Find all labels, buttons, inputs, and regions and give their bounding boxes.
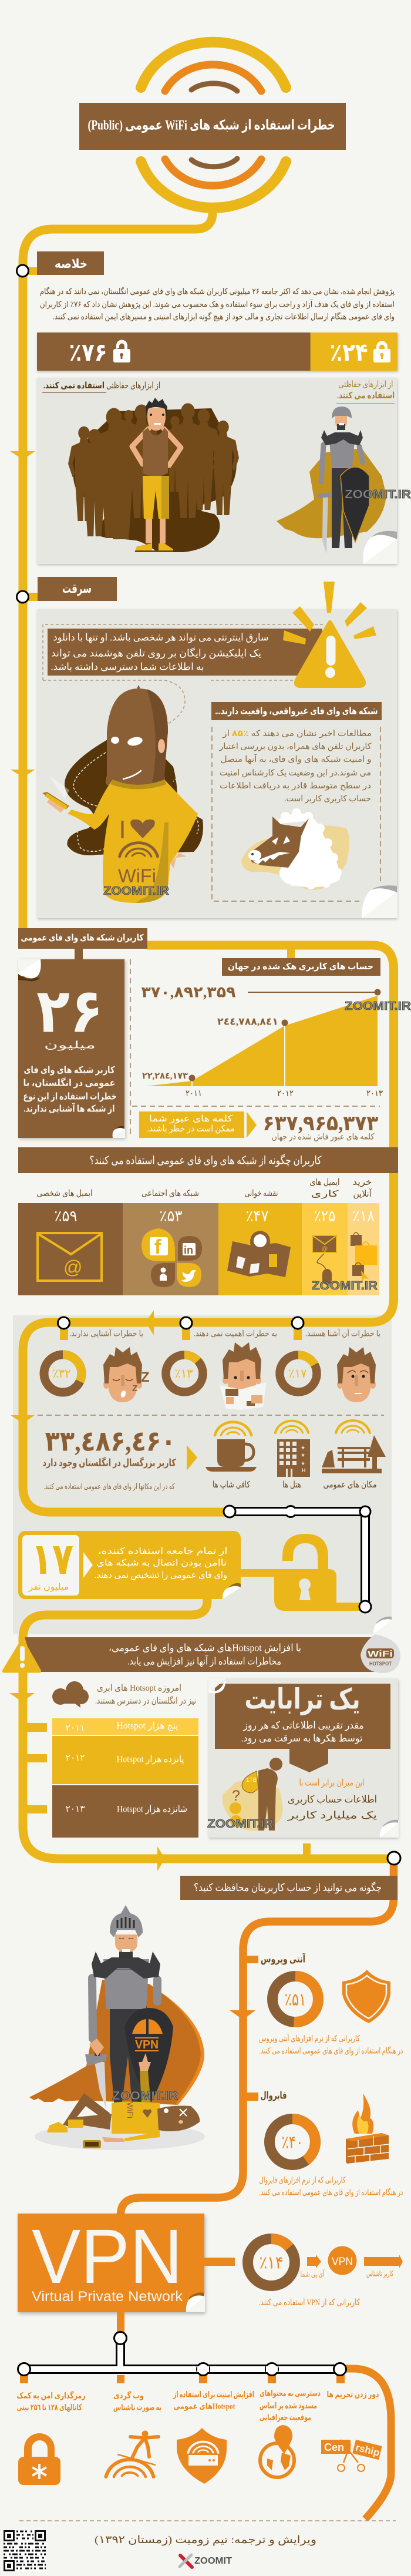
icon: hotel: ★ (301, 1460, 305, 1466)
callout: internet thief: یک اپلیکیشن رایگان بر روی تلفن هوشمند می تواند (51, 647, 261, 659)
row: 2013: شانزده هزار Hotspot (117, 1805, 187, 1815)
text block: fake networks (219, 729, 372, 804)
sword (95, 2062, 106, 2109)
white tube: VPN benefits connector (18, 2332, 346, 2383)
icon: warning triangle (283, 582, 376, 686)
orange route: right tail (343, 2369, 391, 2519)
node: aware (292, 1317, 380, 1340)
shield with VPN: VPN (135, 2038, 159, 2051)
icon: burning brick wall (346, 2093, 389, 2164)
column: map reading 47%: نقشه خوانی (244, 1189, 278, 1198)
icon: hotel (275, 1421, 310, 1490)
callout: passwords at risk (139, 1111, 257, 1138)
yellow route line: right side loop (23, 945, 393, 1512)
heading: public wifi users: کاربران شبکه های وای فای عمومی (21, 933, 144, 943)
arrow: route right (157, 1846, 165, 1871)
arms (92, 1978, 157, 2038)
illustration: wolf in sheep's clothing (241, 808, 349, 890)
donut: 32% (44, 1355, 82, 1392)
icon: cloud (52, 1681, 89, 1708)
text: firewall users (260, 2176, 403, 2197)
watermark: ZOOMIT.IR (312, 1279, 378, 1292)
stat: adult users in the UK: که در این مکانها از وای فای های عمومی استفاده می کنند. (43, 1482, 175, 1491)
table: hotspots per year (27, 1718, 198, 1838)
arrow: route left (146, 1310, 154, 1335)
panel: theft (37, 582, 397, 918)
watermark: ZOOMIT.IR (345, 488, 411, 501)
brown headline with pointer: توسط هکرها به سرقت می رود. (241, 1733, 363, 1744)
column: social networks 53%: f (154, 1236, 161, 1258)
benefit: encryption: کانالهای ۱۲۸ تا ‭۲۵٦‬ بیتی (16, 2404, 82, 2412)
icon: hotel: هتل ها (282, 1480, 301, 1490)
heading: summary: خلاصه (55, 257, 87, 271)
column: online shopping 18%: ٪۱۸ (352, 1208, 375, 1224)
text block: unaware users: از شبکه ها آشنایی ندارند. (23, 1102, 115, 1114)
text: do not use protection (42, 381, 160, 392)
title: خطرات استفاده از شبکه های WiFi عمومی (Public) (88, 117, 335, 133)
text: do not use protection: از ابزارهای حفاظتی (106, 381, 160, 391)
row: 2013: ۲۰۱۳ (66, 1805, 85, 1814)
text block: unaware users: عمومی در انگلستان، با (23, 1077, 115, 1088)
callout: 17 million: ۱۷ (31, 1536, 73, 1584)
icon: hotel: ★ (301, 1452, 305, 1458)
page curl bottom-right (113, 1126, 125, 1138)
column: map reading 47% (218, 1189, 302, 1295)
illustration: unprotected crowd with worried man (68, 398, 239, 552)
column: work email 25%: ٪۲۵ (314, 1208, 336, 1224)
stat bar: 76 and 24 percent (37, 333, 397, 371)
row: 2012: ۲۰۱۲ (66, 1754, 85, 1763)
heading: public wifi users (18, 928, 147, 960)
donut: 40% (269, 2119, 315, 2165)
shoulders (92, 1952, 160, 1979)
benefit: encryption: رمزگذاری امن به کمک (16, 2391, 86, 2400)
section: firewall: فایروال (261, 2090, 287, 2102)
icon: VPN circle: VPN (332, 2256, 353, 2268)
callout: 17 million: ناامن بودن اتصال به شبکه های (96, 1559, 227, 1568)
callout: internet thief: به اطلاعات شما دسترسی داشته باشد. (50, 661, 204, 672)
text: do not use protection: استفاده نمی کنند. (43, 381, 105, 391)
benefit: anonymous browsing: وب گردی (113, 2391, 144, 2400)
icon: shield with router (177, 2428, 227, 2484)
column: personal email 59%: @ (63, 1257, 82, 1278)
benefit: geo-restricted content: دسترسی به محتواهای (260, 2390, 321, 2398)
node: not aware: با خطرات آشنایی ندارند. (69, 1329, 143, 1338)
benefit: geo-restricted content: موقعیت جغرافیایی (260, 2413, 311, 2423)
node: do not care: به خطرات اهمیت نمی دهند. (194, 1330, 277, 1338)
column: personal email 59%: ٪۵۹ (54, 1208, 78, 1224)
benefit: bypass censorship: دور زدن تحریم ها (326, 2391, 379, 2399)
heading: hacked accounts (222, 949, 380, 976)
donut: 14% use VPN: ٪۱۴ (260, 2253, 283, 2272)
text block: fake networks: می شوند.در این وضعیت یک کارشناس امنیت (220, 768, 371, 778)
illustration: armored knight with cape (277, 407, 386, 554)
ground shadow (35, 2123, 205, 2150)
benefit: hotspot security: Hotspotهای عمومی (174, 2403, 235, 2411)
arrow: route down (230, 2010, 255, 2020)
dashed divider (38, 1415, 384, 1416)
chart: hacked accounts by year: ۲۰۱۳ (366, 1089, 383, 1099)
panel: VPN: Virtual Private Network (32, 2289, 183, 2305)
stat: adult users in the UK (42, 1426, 176, 1491)
icon: globe with pin (260, 2425, 294, 2477)
text: antivirus users: کاربرانی که از نرم افزارهای آنتی ویروس (259, 2034, 360, 2043)
shield with VPN (124, 2008, 173, 2105)
text block: unaware users (23, 1066, 116, 1114)
row: 2012 (52, 1736, 198, 1784)
text block: unaware users: خطرات استفاده از این نوع (23, 1091, 116, 1102)
panel: VPN: VPN (32, 2213, 183, 2299)
page curl (363, 531, 397, 564)
illustration: person carrying data sack (223, 1758, 282, 1831)
arrow: route down (11, 1415, 35, 1423)
yellow route line: hotspot section (23, 1599, 394, 1859)
column: online shopping 18% (348, 1178, 379, 1295)
icon: closed lock (373, 341, 390, 362)
page curl (373, 1617, 392, 1634)
orange route line: protection section (121, 1862, 393, 2215)
text: antivirus users (259, 2034, 403, 2056)
heading: how users use public wifi: کاربران چگونه از شبکه های وای فای عمومی استفاده می کنند؟ (89, 1154, 322, 1167)
heading: theft: سرقت (62, 582, 92, 596)
callout: 17 million: از تمام جامعه استفاده کننده، (97, 1547, 228, 1556)
face and helmet (115, 1934, 137, 1952)
section: firewall (247, 2090, 403, 2197)
chart: hacked accounts by year: ‭۲٤٤,۷۸۸,۸٤۱‬ (217, 1016, 278, 1027)
icon: sleeping face (103, 1347, 150, 1402)
icon: censorship scissors: Cen (324, 2441, 344, 2453)
cape (29, 1980, 204, 2105)
icon: wifi hotspot badge (361, 1634, 400, 1673)
text: use protection: از ابزارهای حفاظتی (338, 380, 393, 389)
text: cloud hotspots (95, 1684, 196, 1706)
icon: wifi signal title emblem (141, 42, 286, 208)
icon: sleeping face: Z (132, 1383, 137, 1393)
heading: how users use public wifi (18, 1147, 398, 1173)
page curl top-left (208, 1678, 226, 1694)
chart: hacked accounts by year (141, 983, 411, 1099)
brown headline with pointer: مقدر تقریبی اطلاعاتی که هر روز (243, 1720, 364, 1731)
banner: hotspot risk: با افزایش Hotspotهای شبکه های وای فای عمومی، (109, 1643, 301, 1653)
brown headline with pointer (215, 1684, 390, 1772)
legs (110, 2006, 147, 2106)
panel: 26 million users: میلیون (44, 1040, 96, 1050)
chart: hacked accounts by year: ۲۰۱۱ (186, 1089, 202, 1099)
donut: 51%: ٪۵۱ (284, 1990, 306, 2009)
column: online shopping 18%: آنلاین (353, 1188, 372, 1199)
text: cloud hotspots: نیز در انگلستان در دسترس هستند. (95, 1695, 196, 1706)
watermark: ZOOMIT.IR (345, 1000, 411, 1013)
title (79, 103, 346, 150)
text block: unaware users: کاربر شبکه های وای فای (23, 1066, 115, 1075)
page curl top-left (18, 959, 41, 981)
icon: web surfer (106, 2431, 159, 2477)
callout: 17 million: میلیون نفر (28, 1583, 69, 1592)
section: antivirus: آنتی ویروس (261, 1953, 306, 1966)
benefit: geo-restricted content: مسدود شده بر اساس (260, 2402, 317, 2411)
dashed divider (130, 959, 131, 1137)
icon: warning triangle (3, 1639, 41, 1672)
heading: how to protect your account: چگونه می توانید از حساب کاربریتان محافظت کنید؟ (194, 1881, 382, 1894)
text: VPN users: کاربرانی که از VPN استفاده می کنند. (259, 2298, 361, 2308)
benefit: geo-restricted content (260, 2390, 321, 2477)
text block: summary paragraph (40, 287, 395, 322)
node: not aware (58, 1317, 143, 1340)
text: firewall users: کاربرانی که از نرم افزارهای فایروال (260, 2176, 346, 2185)
dashed divider (19, 2520, 396, 2521)
arrow: IP to VPN (307, 2255, 321, 2268)
icon: VPN circle (328, 2246, 357, 2275)
chart: hacked accounts by year: ‭۲۲,۲۸٤,۱۷۳‬ (142, 1072, 188, 1081)
arrow: to places (187, 1445, 197, 1470)
text: equal to one billion users: این میزان برابر است با (299, 1778, 364, 1788)
banner: hotspot risk (3, 1634, 400, 1673)
stat bar: 76 and 24 percent: ٪۲۴ (330, 340, 368, 367)
label: your IP: آی پی شما (301, 2269, 325, 2278)
connector (303, 1843, 311, 1855)
banner: hotspot risk: مخاطرات استفاده از آنها نیز افزایش می یابد. (127, 1654, 281, 1667)
illustration: hooded thief with wifi shirt (42, 685, 203, 903)
benefit: anonymous browsing (106, 2391, 161, 2477)
icon: wifi hotspot badge: HOTSPOT (369, 1661, 392, 1667)
arrow: VPN to anonymous (364, 2255, 403, 2268)
illustration: hooded thief with wifi shirt: WiFi (118, 865, 156, 886)
text block: fake networks: و امنیت شبکه های وای فای، به آنها متصل (221, 754, 371, 764)
node: aware: با خطرات آن آشنا هستند. (305, 1329, 380, 1338)
section: antivirus (230, 1953, 403, 2056)
callout: passwords at risk: کلمه های عبور شما (149, 1114, 233, 1124)
orange route: VPN down to tube (117, 2312, 124, 2336)
icon: censorship scissors (321, 2440, 382, 2471)
arrow: route down (9, 1693, 35, 1702)
icon: shield (342, 1970, 390, 2023)
page curl (186, 2292, 205, 2312)
benefit: hotspot security: افزایش امنیت برای استفاده از (173, 2391, 254, 2399)
donut: 17% (279, 1355, 317, 1392)
donut: 51% (272, 1976, 318, 2022)
column: personal email 59% (18, 1189, 123, 1295)
logo: zoomit (180, 2555, 232, 2567)
column: social networks 53% (123, 1189, 218, 1295)
arrow: route down (11, 770, 35, 777)
heading: how to protect your account (180, 1876, 397, 1900)
icon: public park: مکان های عمومی (323, 1480, 377, 1490)
page curl bottom-right (380, 1820, 399, 1838)
donut: 40%: ٪۴۰ (282, 2132, 303, 2152)
watermark: ZOOMIT.IR (112, 2090, 178, 2103)
icon: open lock (113, 340, 130, 362)
icon: sleeping face: Z (141, 1369, 150, 1385)
callout: internet thief: سارق اینترنتی می تواند هر شخصی باشد. او تنها با دانلود (53, 632, 269, 644)
heading: fake wifi networks (211, 702, 382, 720)
benefit: encryption (16, 2391, 86, 2485)
panel: one terabyte (207, 1678, 399, 1838)
icon: worried face (337, 1347, 376, 1402)
illustration: VPN knight defeating thief (29, 1905, 205, 2150)
icon: public park (322, 1420, 386, 1490)
column: social networks 53%: ٪۵۳ (160, 1208, 183, 1224)
connector (204, 2258, 235, 2266)
donut: 32%: ٪۳۲ (53, 1366, 70, 1381)
illustration: person carrying data sack: ? (232, 1788, 240, 1804)
column: work email 25%: کاری (311, 1190, 339, 1199)
row: 2011: پنج هزار Hotspot (116, 1721, 178, 1732)
text: equal to one billion users: یک میلیارد کاربر (287, 1809, 377, 1821)
dashed callout frame (43, 624, 323, 724)
text block: fake networks: کاربران تلفن های همراه، بدون بررسی اعتبار (219, 742, 372, 751)
donut: 13% (166, 1355, 203, 1392)
column: social networks 53%: شبکه های اجتماعی (142, 1189, 199, 1198)
page curl (362, 885, 397, 918)
dashed divider (132, 1106, 380, 1107)
callout: passwords at risk: ممکن است در خطر باشند. (147, 1124, 235, 1134)
icon: hotel: H (302, 1467, 305, 1473)
arrow: route down (10, 451, 35, 459)
icon: coffee shop: کافی شاپ ها (213, 1480, 251, 1490)
stat: leaked passwords: ۶۳۷,۹۶۵,۳۷۳ (263, 1111, 379, 1135)
stat: adult users in the UK: کاربر بزرگسال در انگلستان وجود دارد (42, 1457, 176, 1469)
row: 2012: پانزده هزار Hotspot (116, 1754, 184, 1765)
fallen thief (47, 2093, 200, 2148)
page curl (223, 1583, 241, 1599)
column: social networks 53%: in (184, 1244, 193, 1256)
text: cloud hotspots: امروزه Hotsopt های ابری (97, 1684, 181, 1693)
column: map reading 47%: ٪۴۷ (245, 1208, 269, 1224)
panel: protected vs unprotected users (37, 378, 411, 564)
text: use protection: استفاده می کنند. (337, 391, 395, 401)
row: 2011 (52, 1718, 198, 1735)
text block: fake networks: مطالعات اخیر نشان می دهند که ٪۸۵ از (222, 729, 372, 738)
callout: 17 million: وای فای عمومی را تشخیص نمی دهند. (95, 1571, 227, 1580)
row: 2011: ۲۰۱۱ (66, 1724, 85, 1733)
body armor (103, 1959, 149, 2009)
text: use protection (336, 380, 395, 404)
text: equal to one billion users: اطلاعات حساب کاربری (288, 1794, 377, 1805)
donut: 13%: ٪۱۳ (175, 1366, 193, 1381)
panel: awareness and public places (11, 1298, 393, 1634)
donut: 17%: ٪۱۷ (289, 1366, 306, 1381)
row: 2013 (52, 1785, 198, 1838)
panel: 26 million users: ۲۶ (36, 978, 103, 1046)
heading: theft (16, 577, 117, 603)
column: work email 25% (302, 1178, 348, 1295)
white tube: connector (224, 1506, 371, 1613)
icon: wifi hotspot badge: WiFi (368, 1649, 393, 1659)
QR code (4, 2530, 46, 2571)
icon: coffee shop (206, 1422, 257, 1490)
benefit: hotspot security (173, 2391, 254, 2484)
text: equal to one billion users (287, 1778, 377, 1821)
node: do not care (180, 1317, 277, 1340)
footer credit: ویرایش و ترجمه: تیم زومیت (زمستان ۱۳۹۲) (95, 2534, 316, 2546)
callout: internet thief (48, 629, 322, 676)
icon: censorship scissors: rship (355, 2441, 381, 2459)
chart: usage columns (18, 1178, 379, 1295)
benefit: bypass censorship (321, 2391, 382, 2471)
stat: leaked passwords: کلمه های عبور فاش شده در جهان (271, 1133, 375, 1142)
illustration: person carrying data sack: 1TB (246, 1777, 257, 1784)
chart: hacked accounts by year: ۳۷۰,۸۹۲,۳۵۹ (141, 983, 236, 1001)
yellow route line on panel (23, 1298, 393, 1512)
brown headline with pointer: یک ترابایت (244, 1684, 361, 1715)
icon: face reading newspaper (220, 1342, 267, 1410)
chart: hacked accounts by year: ۲۰۱۲ (277, 1089, 294, 1099)
icon: hotel: ★ (301, 1445, 305, 1450)
column: personal email 59%: ایمیل های شخصی (36, 1189, 93, 1198)
watermark: ZOOMIT.IR (103, 885, 170, 898)
stat: adult users in the UK: ‭۳۳,٤۸۶,٤۶۰‬ (45, 1426, 176, 1457)
text block: fake networks: حساب کاربری کاربر است. (284, 794, 371, 804)
heading: hacked accounts: حساب های کاربری هک شده در جهان (228, 962, 373, 972)
stat bar: 76 and 24 percent: ٪۷۶ (69, 340, 107, 367)
icon: lock with asterisk (18, 2433, 60, 2485)
callout: 17 million (18, 1531, 274, 1599)
heading: summary (16, 251, 104, 277)
text block: fake networks: در سطح متوسط قادر به دریافت اطلاعات (220, 781, 371, 791)
column: work email 25%: ایمیل های (310, 1178, 339, 1187)
watermark: ZOOMIT.IR (207, 1818, 274, 1831)
donut: 14% use VPN (248, 2239, 295, 2286)
column: work email 25%: @ (322, 1246, 328, 1252)
panel: 26 million users (18, 959, 125, 1138)
benefit: anonymous browsing: به صورت ناشناس (113, 2404, 161, 2412)
column: online shopping 18%: خرید (352, 1178, 372, 1187)
yellow route line: title to section label (23, 206, 213, 929)
fallen thief: WiFi (126, 2102, 135, 2118)
logo: zoomit: ZOOMIT (194, 2556, 232, 2566)
node: route junction (388, 1852, 400, 1865)
label: anonymous user: کاربر ناشناس (366, 2269, 394, 2278)
dashed frame (212, 727, 380, 901)
icon: padlock (274, 1534, 365, 1611)
